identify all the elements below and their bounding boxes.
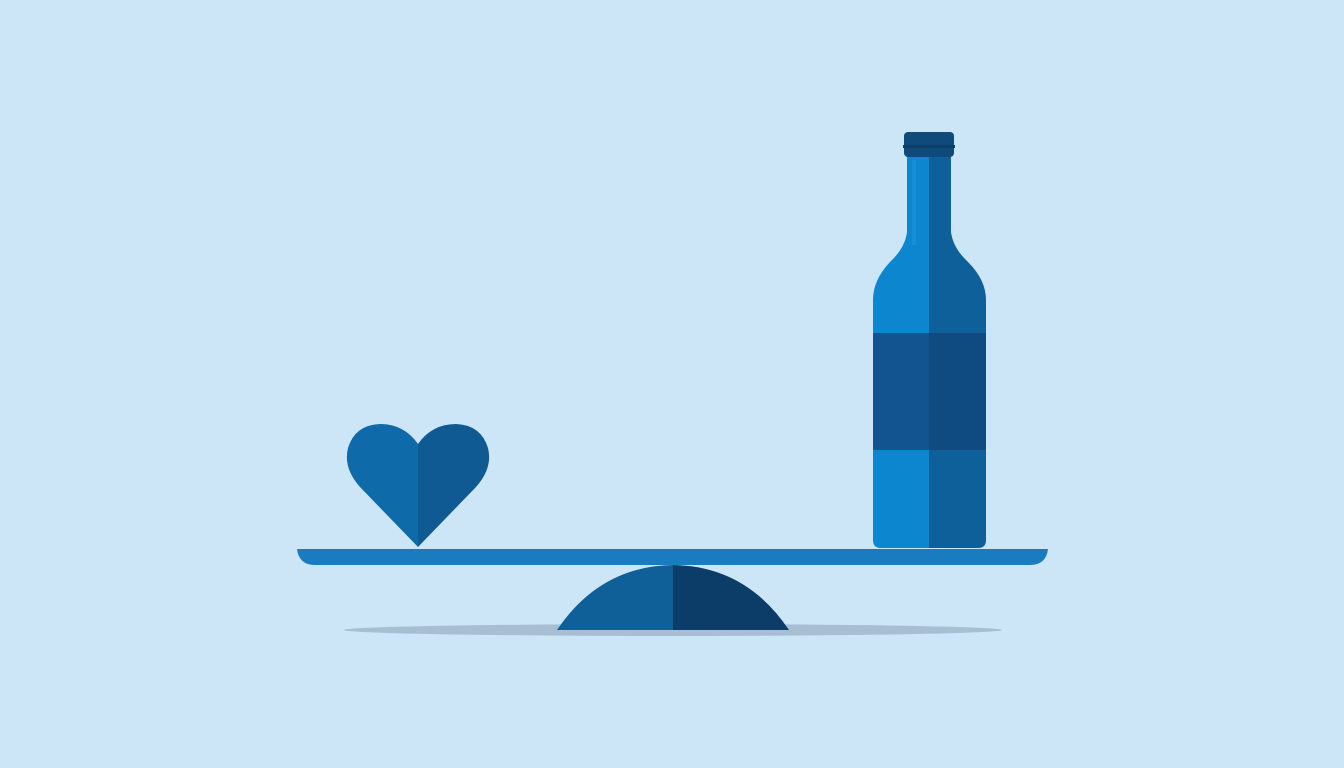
cap: [904, 132, 954, 157]
fulcrum dome: [557, 565, 789, 630]
neck and body left half: [873, 157, 929, 548]
shadow under fulcrum: [344, 624, 1002, 636]
beam: [297, 549, 1048, 565]
right half: [929, 157, 986, 548]
heart icon: [347, 424, 489, 547]
label: [873, 333, 986, 450]
highlight: [912, 160, 916, 245]
bottle icon: [873, 132, 986, 548]
